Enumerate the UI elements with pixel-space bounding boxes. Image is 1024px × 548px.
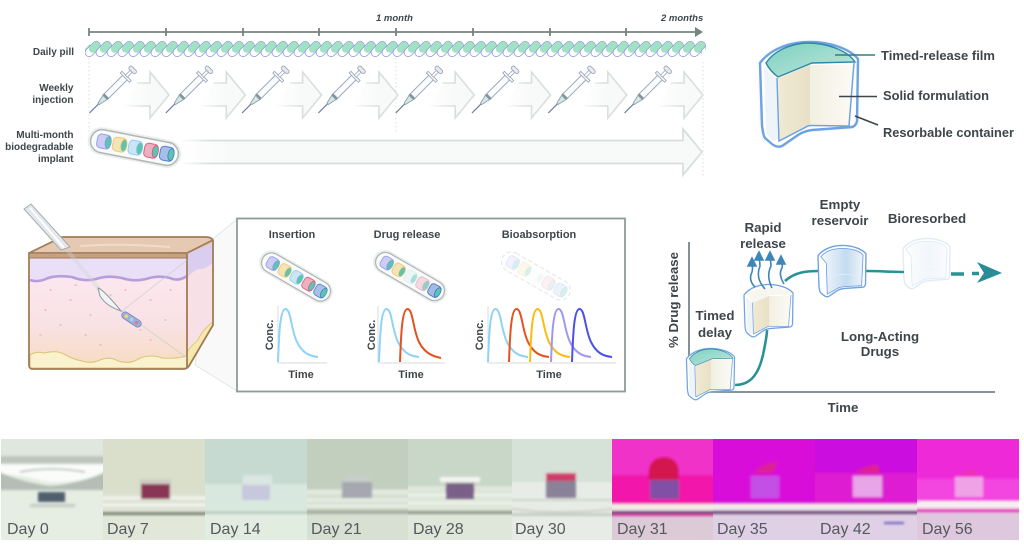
label: timed delay: Timed xyxy=(696,308,734,323)
photo: day 0: Day 0 xyxy=(7,521,49,538)
weekly injection syringes xyxy=(85,64,674,118)
photo: day 14: Day 14 xyxy=(210,521,261,538)
release curve xyxy=(735,262,1002,385)
heading: drug release: Drug release xyxy=(374,229,440,241)
label: bioresorbed: Bioresorbed xyxy=(888,211,966,226)
photo: day 42 xyxy=(815,439,917,540)
label: timed delay: delay xyxy=(698,325,733,340)
row label: multi-month implant: biodegradable xyxy=(5,142,74,153)
photo: day 0 xyxy=(1,439,103,540)
chart: bioabsorption xyxy=(488,306,616,363)
implant: bioabsorbed xyxy=(498,248,574,304)
axis label: time: Time xyxy=(536,369,562,381)
heading: bioabsorption: Bioabsorption xyxy=(502,229,577,241)
photo: day 42: Day 42 xyxy=(820,521,871,538)
axis label: conc.: Conc. xyxy=(366,320,378,350)
photo: day 30: Day 30 xyxy=(515,521,566,538)
label: long-acting drugs: Long-Acting xyxy=(841,329,919,344)
photo strip xyxy=(0,435,1024,540)
stage: empty reservoir cup xyxy=(818,245,866,297)
callout: resorbable container xyxy=(855,116,1014,140)
photo: day 28 xyxy=(408,439,512,540)
chart: drug release over time xyxy=(666,197,1002,415)
photo: day 31 xyxy=(612,439,713,540)
photo: day 7: Day 7 xyxy=(107,521,149,538)
callout: resorbable container: Resorbable container xyxy=(883,126,1014,140)
row label: daily pill: Daily pill xyxy=(33,47,74,58)
axis label: conc.: Conc. xyxy=(264,320,276,350)
chart: insertion xyxy=(278,306,327,363)
label: long-acting drugs: Drugs xyxy=(861,344,899,359)
photo: day 56 xyxy=(917,439,1019,540)
axis label: time: Time xyxy=(828,400,858,415)
photo: day 56: Day 56 xyxy=(922,521,973,538)
implant: partly released xyxy=(370,247,450,306)
row label: weekly injection: injection xyxy=(32,95,74,106)
row label: multi-month implant: implant xyxy=(38,154,74,165)
insertion needle xyxy=(24,204,121,311)
weekly injection arrows xyxy=(123,72,703,118)
photo: day 14 xyxy=(205,439,307,540)
photo: day 28: Day 28 xyxy=(413,521,464,538)
reservoir cutaway diagram xyxy=(760,42,858,147)
label: empty reservoir: Empty xyxy=(820,197,860,212)
photo: day 7 xyxy=(103,439,205,540)
photo: day 21: Day 21 xyxy=(311,521,362,538)
release arrows xyxy=(748,252,785,289)
label: 1 month: 1 month xyxy=(376,13,413,24)
heading: insertion: Insertion xyxy=(269,229,316,241)
row label: weekly injection: Weekly xyxy=(39,83,74,94)
label: 2 months: 2 months xyxy=(660,13,703,24)
inserted implant xyxy=(120,311,143,328)
timeline axis xyxy=(89,13,703,37)
photo: day 31: Day 31 xyxy=(617,521,668,538)
implant: intact xyxy=(256,248,336,306)
label: empty reservoir: reservoir xyxy=(812,213,868,228)
stage: bioresorbed cup xyxy=(903,238,950,289)
stage: timed delay cup xyxy=(686,348,734,400)
magnification connector xyxy=(195,219,237,391)
implant capsule xyxy=(87,126,182,169)
label: rapid release: release xyxy=(740,236,786,251)
photo: day 21 xyxy=(307,439,408,540)
daily pill strip xyxy=(84,40,707,60)
label: rapid release: Rapid xyxy=(745,220,781,235)
skin cross-section xyxy=(24,204,213,369)
stage: rapid release cup xyxy=(744,284,793,337)
long implant arrow xyxy=(180,129,702,175)
photo: day 35: Day 35 xyxy=(717,521,768,538)
callout: timed-release film: Timed-release film xyxy=(881,49,995,63)
panel: release stages xyxy=(237,218,625,392)
axis label: % drug release: % Drug release xyxy=(666,252,681,348)
axis label: conc.: Conc. xyxy=(474,320,486,350)
row label: multi-month implant: Multi-month xyxy=(16,130,74,141)
callout: solid formulation: Solid formulation xyxy=(883,89,989,103)
photo: day 30 xyxy=(512,439,612,540)
chart: drug release xyxy=(378,306,445,363)
axis label: time: Time xyxy=(398,369,424,381)
photo: day 35 xyxy=(713,439,815,540)
axis label: time: Time xyxy=(288,369,314,381)
